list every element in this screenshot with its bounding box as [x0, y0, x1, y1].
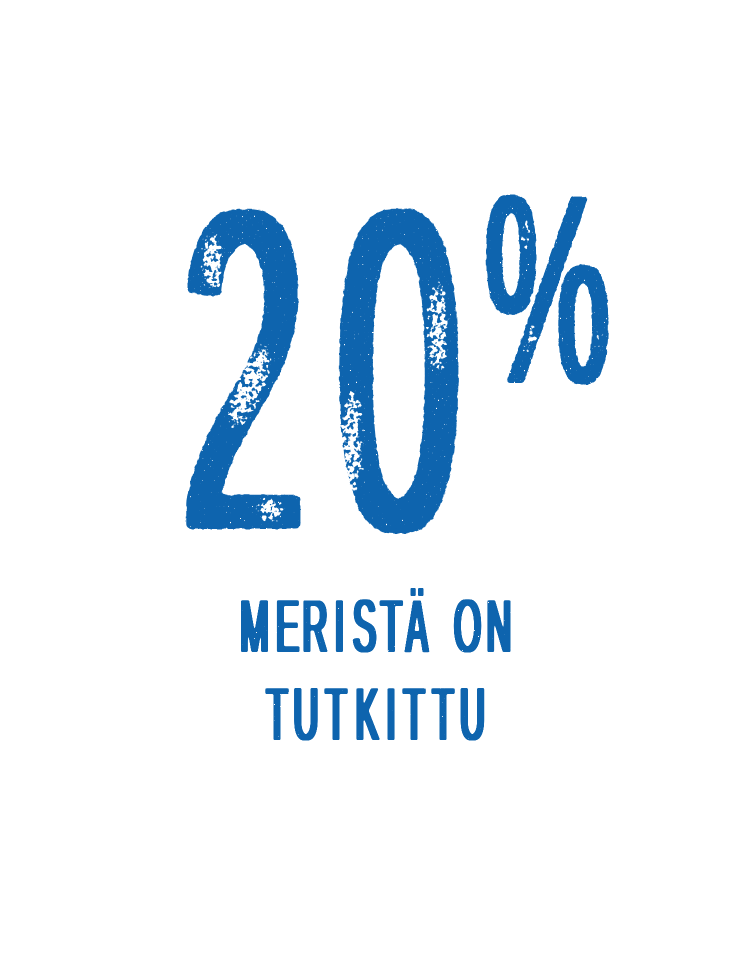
caption line 1: ON — [454, 585, 511, 669]
caption line 1 — [240, 585, 511, 669]
big number 20: 20 — [182, 116, 460, 627]
caption line 1: MERIST — [240, 585, 402, 669]
caption line 1: Ä — [405, 585, 429, 669]
statistic: 20 percent — [182, 116, 610, 627]
percent sign: % — [484, 141, 610, 439]
worn ink patches — [199, 211, 606, 526]
caption — [240, 585, 511, 757]
caption line 2: TUTKITTU — [266, 673, 485, 757]
